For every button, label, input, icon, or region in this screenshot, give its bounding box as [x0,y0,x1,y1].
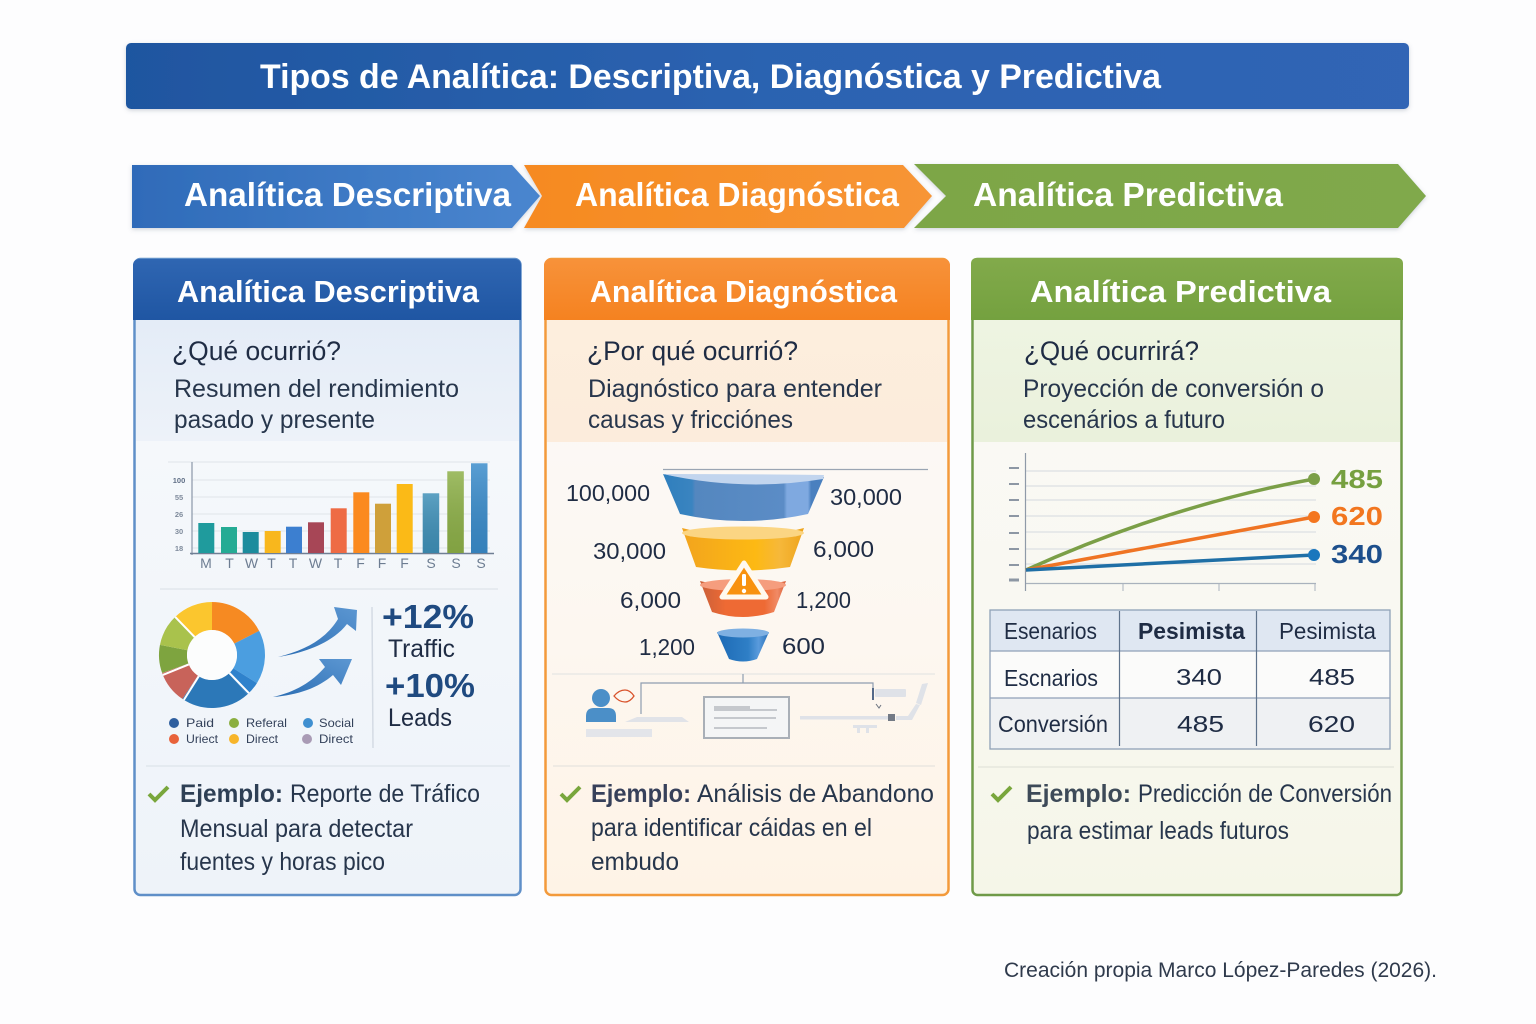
kpi: leads: Leads [388,704,452,732]
legend: Social [319,716,354,730]
arrow: diagnostica [524,165,932,228]
bar chart: T [334,555,343,571]
question text: Resumen del rendimiento [174,375,459,403]
legend [169,716,354,746]
scenarios table: Esenarios [1004,618,1097,644]
funnel stage 2 [682,526,804,570]
scenarios table: 485 [1309,664,1355,690]
line chart: 340 [1331,539,1383,569]
question text: escenários a futuro [1023,406,1225,434]
question text: ¿Qué ocurrió? [172,336,341,366]
scenarios table: Conversión [998,711,1108,737]
panel heading: Analítica Descriptiva [177,274,480,309]
example text: embudo [591,848,679,876]
example text [992,780,1392,845]
funnel chart [566,470,928,662]
example text: fuentes y horas pico [180,848,385,876]
funnel stage 1 [663,474,824,521]
arrow: predictiva [914,164,1426,228]
example text: Ejemplo: [591,780,691,808]
bar chart: S [476,555,486,571]
panel: diagnostica [544,259,950,895]
bar chart: 26 [175,510,183,519]
credit text: Creación propia Marco López-Paredes (2026). [1004,959,1437,982]
title banner: Tipos de Analítica: Descriptiva, Diagnóstica y Predictiva [260,58,1162,96]
question text [1023,336,1324,434]
process arrows [132,164,1426,228]
arrow: predictiva: Analítica Predictiva [973,176,1284,213]
funnel labels: 6,000 [813,536,874,562]
example text [149,780,480,876]
kpi: traffic [382,598,474,663]
kpi: traffic: +12% [382,598,474,635]
example text: para identificar cáidas en el [591,814,872,842]
funnel labels: 1,200 [796,587,851,613]
bar chart: 100 [173,476,185,485]
line chart: 485 [1331,464,1383,494]
line chart: 620 [1331,501,1383,531]
funnel labels: 600 [782,633,825,659]
bar chart: F [378,555,386,571]
funnel labels: 6,000 [620,587,681,613]
bar chart: T [267,555,276,571]
bar chart: T [225,555,234,571]
arrow: descriptiva [132,165,540,228]
panel heading: Analítica Predictiva [1030,274,1332,309]
line chart [1009,453,1383,591]
legend: Referal [246,716,287,730]
bar chart: F [400,555,409,571]
title banner [126,43,1409,109]
bar chart: 55 [175,493,183,502]
funnel labels: 100,000 [566,480,650,506]
panel heading [544,259,950,320]
bar chart: 18 [175,544,183,553]
scenarios table: Escnarios [1004,665,1098,691]
example text: Ejemplo: [180,780,283,808]
icon: growth arrow up [278,607,357,657]
question text: Proyección de conversión o [1023,375,1324,403]
funnel labels: 30,000 [830,484,902,510]
scenarios table: 620 [1308,711,1355,737]
bar chart: S [451,555,461,571]
example text: Ejemplo: [1026,780,1131,808]
bar chart: T [289,555,298,571]
scenarios table: 340 [1176,664,1222,690]
icon: user [586,689,634,722]
panel: descriptiva [133,259,521,895]
panel: predictiva [971,258,1403,895]
question text: causas y fricciónes [588,406,793,434]
scenarios table: Pesimista [1138,618,1245,644]
question text [587,336,882,434]
icon: growth arrow lower [273,659,352,697]
bar chart: 30 [175,527,183,536]
bar chart: W [309,555,323,571]
bar chart [168,462,494,571]
donut chart [163,616,251,700]
bar chart: W [245,555,259,571]
funnel stage 4 [717,628,769,662]
funnel labels: 30,000 [593,538,666,564]
icon: document [704,697,789,738]
example text: Análisis de Abandono [697,780,934,808]
kpi: leads [385,667,475,732]
example text: Mensual para detectar [180,815,413,843]
legend: Direct [319,732,354,746]
icon: warning [722,563,766,597]
bar chart: S [426,555,436,571]
funnel stage 3 [700,579,786,617]
legend: Direct [246,732,279,746]
example text [561,780,934,876]
scenarios table: 485 [1177,711,1224,737]
panel heading [133,259,521,320]
funnel labels: 1,200 [639,634,695,660]
legend: Paid [186,716,214,730]
process diagram [586,674,928,738]
question text: Diagnóstico para entender [588,375,882,403]
kpi: leads: +10% [385,667,475,704]
example text: Predicción de Conversión [1138,780,1392,808]
question text: pasado y presente [174,406,375,434]
question text [172,336,459,434]
panel heading [971,258,1403,320]
panel heading: Analítica Diagnóstica [590,274,898,309]
arrow: diagnostica: Analítica Diagnóstica [575,176,900,213]
bar chart: F [356,555,365,571]
scenarios table [990,610,1390,749]
arrow: descriptiva: Analítica Descriptiva [184,176,512,213]
bar chart: M [200,555,212,571]
question text: ¿Qué ocurrirá? [1024,336,1199,366]
example text: para estimar leads futuros [1027,817,1289,845]
legend: Uriect [186,732,219,746]
question text: ¿Por qué ocurrió? [587,336,798,366]
kpi: traffic: Traffic [388,635,455,663]
scenarios table: Pesimista [1279,618,1376,644]
example text: Reporte de Tráfico [290,780,480,808]
funnel labels [566,480,902,660]
